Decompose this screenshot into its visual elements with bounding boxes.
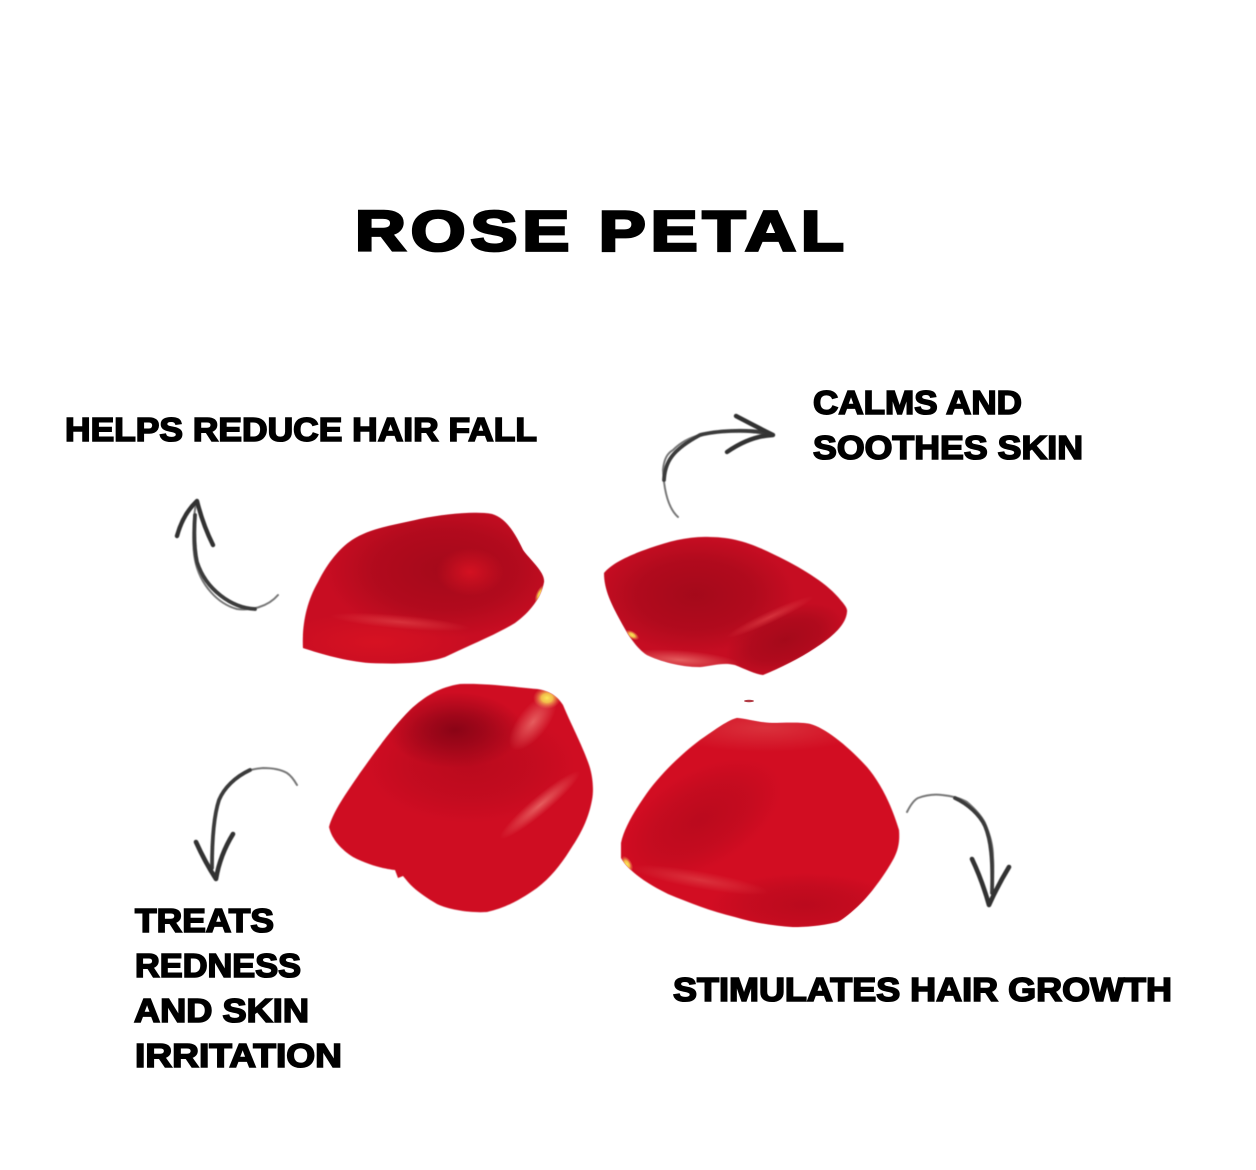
label: treats redness and skin irritation: IRRITATION	[135, 1037, 342, 1074]
label: calms and soothes skin	[813, 384, 1083, 466]
label: treats redness and skin irritation	[134, 902, 342, 1074]
petal: bottom left	[329, 684, 593, 912]
label: helps reduce hair fall: HELPS REDUCE HAIR FALL	[65, 411, 537, 448]
label: treats redness and skin irritation: REDNESS	[135, 947, 301, 984]
small petal fragment	[744, 700, 754, 702]
arrow: down from bottom left petal	[196, 768, 297, 879]
arrow: right from top right petal	[663, 416, 773, 517]
label: stimulates hair growth: STIMULATES HAIR GROWTH	[673, 971, 1172, 1008]
label: treats redness and skin irritation: AND SKIN	[134, 992, 309, 1029]
petal: top right	[603, 536, 848, 676]
arrow: up from top left petal	[177, 501, 278, 609]
label: treats redness and skin irritation: TREATS	[135, 902, 274, 939]
petal: bottom right	[620, 717, 900, 928]
petal: top left	[302, 512, 545, 664]
title: ROSE PETAL	[355, 199, 849, 263]
label: calms and soothes skin: CALMS AND	[813, 384, 1022, 421]
arrow: down from bottom right petal	[907, 795, 1009, 905]
infographic canvas	[66, 210, 1170, 1068]
label: calms and soothes skin: SOOTHES SKIN	[813, 429, 1083, 466]
